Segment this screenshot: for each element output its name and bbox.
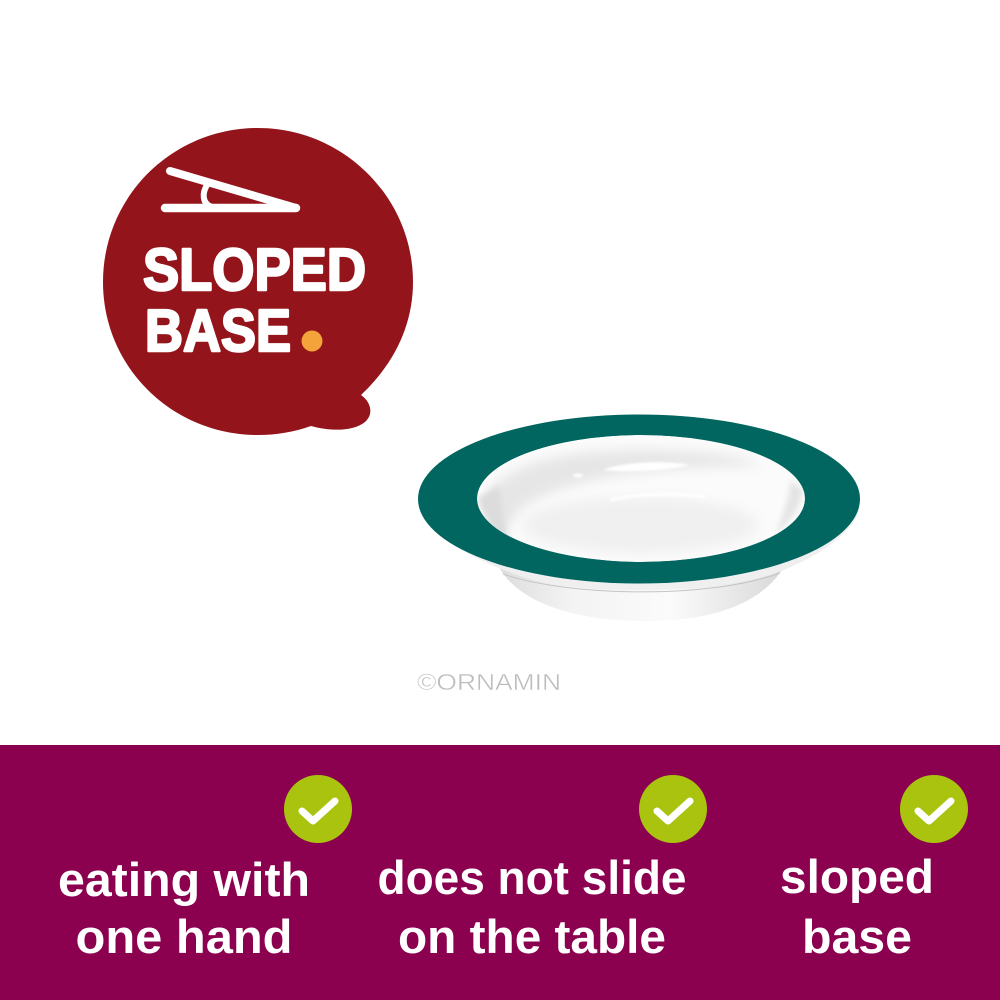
plate underside: [498, 565, 785, 621]
bowl base: [477, 435, 805, 562]
feature label: base: [802, 910, 912, 963]
feature: eating with one hand: [58, 775, 352, 963]
badge title: BASE: [145, 298, 291, 364]
bowl upper wall shadow: [484, 450, 760, 540]
badge title: SLOPED: [143, 237, 366, 303]
teal rim: [418, 414, 860, 584]
plate outer rim edge: [418, 503, 859, 590]
bowl highlight: [603, 462, 690, 471]
feature label: eating with: [58, 853, 310, 906]
check icon: [639, 775, 707, 843]
plate rim lower line: [503, 573, 780, 592]
banner background: [0, 745, 1000, 1000]
badge background: [103, 128, 413, 435]
inner bowl: [477, 435, 805, 562]
feature label: on the table: [398, 910, 666, 963]
feature label: does not slide: [378, 851, 686, 904]
feature: does not slide: [378, 775, 707, 963]
bottom banner: [0, 745, 1000, 1000]
feature: sloped base: [780, 775, 968, 963]
bowl small highlight: [573, 474, 583, 477]
check icon: [900, 775, 968, 843]
feature label: one hand: [76, 910, 292, 963]
bowl well ridge: [612, 498, 619, 500]
orange dot: [302, 330, 322, 352]
feature label: sloped: [780, 850, 934, 903]
copyright: ©ORNAMIN: [417, 669, 561, 695]
icon: sloped base: [165, 171, 296, 208]
check icon: [284, 775, 352, 843]
bowl well: [530, 500, 751, 550]
badge: sloped base: [103, 128, 413, 435]
plate illustration: [418, 414, 860, 621]
badge title: [143, 237, 366, 364]
bowl left shadow: [477, 488, 512, 538]
bowl right edge shadow: [775, 480, 803, 535]
